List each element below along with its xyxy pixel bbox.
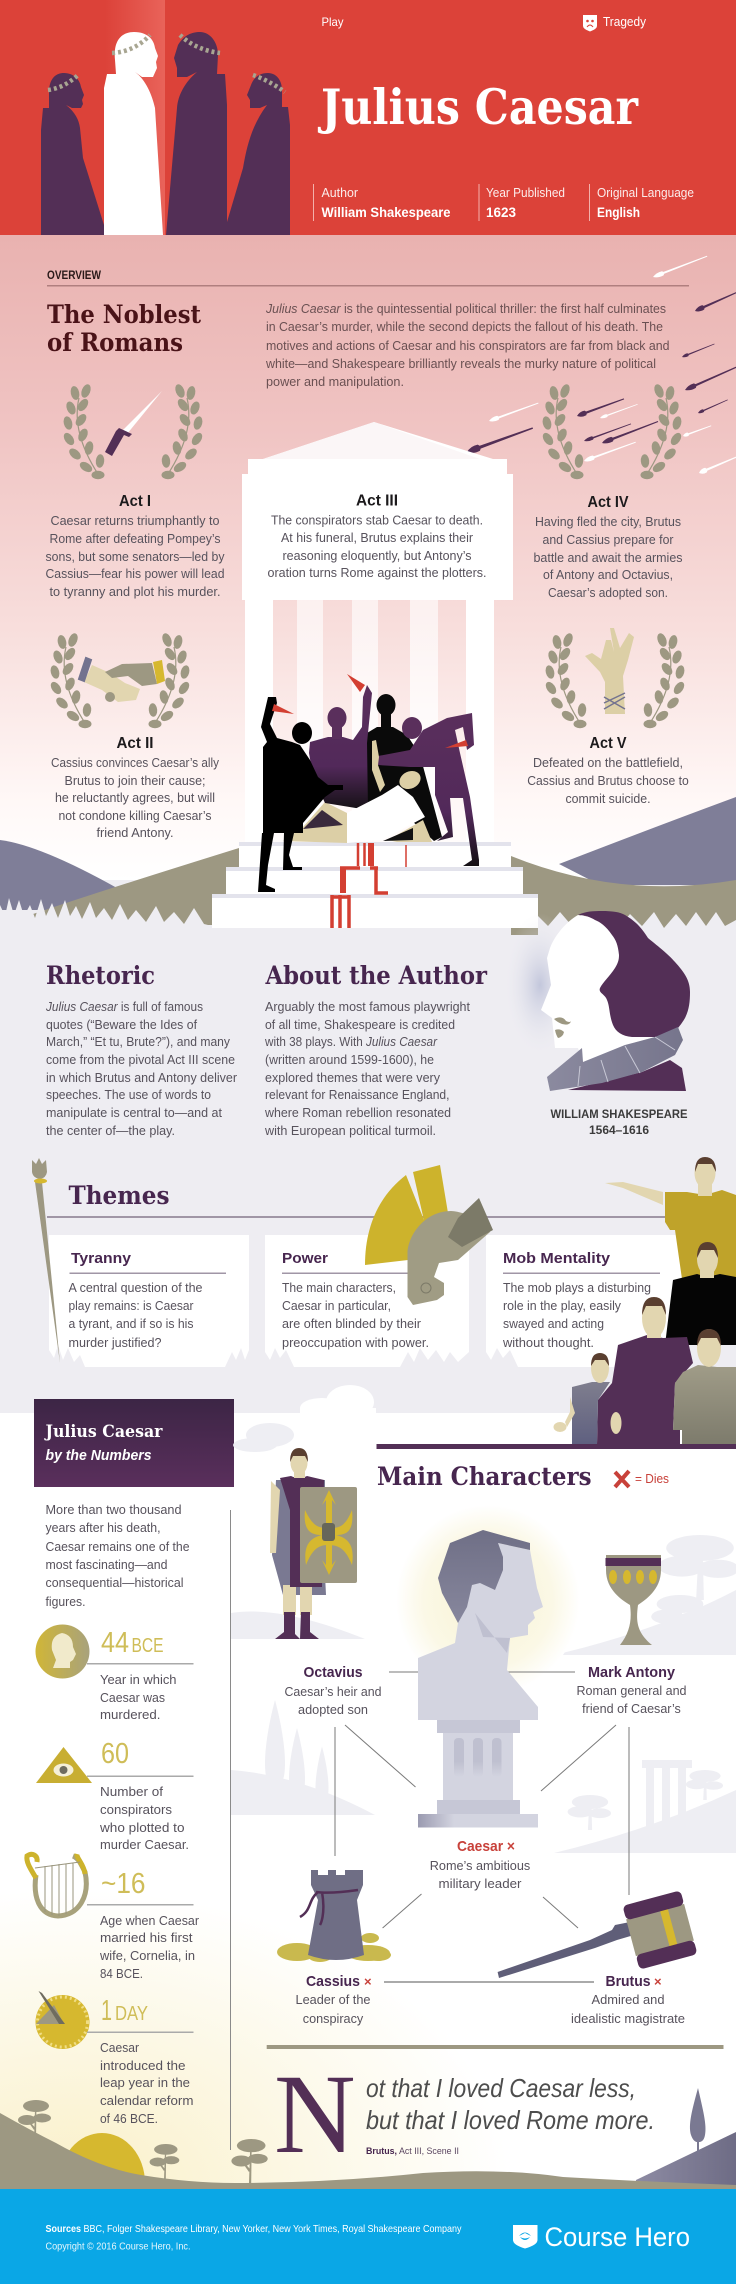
- text: overview paragraph: [265, 302, 670, 389]
- card: Tyranny: Tyranny: [71, 1250, 132, 1267]
- stat: 1 day: Caesar: [100, 2041, 139, 2055]
- figure: middle conspirator: [309, 674, 372, 810]
- text: Act II: [51, 735, 220, 840]
- panel: overview: [47, 270, 689, 389]
- background: pale yellow glow: [0, 1860, 560, 2189]
- text: Act III: The conspirators stab Caesar to death.: [271, 514, 483, 528]
- figure: Caesar: [347, 740, 432, 843]
- character: Mark Antony: [576, 1664, 687, 1716]
- text: Rhetoric body: in which Brutus and Antony deliver: [46, 1071, 237, 1085]
- text: Act II: Act II: [116, 735, 154, 752]
- character: Octavius: Caesar’s heir and: [284, 1685, 382, 1699]
- character: Caesar: Caesar ×: [457, 1838, 515, 1855]
- figure: back conspirator: [367, 694, 442, 841]
- text: Act I: Act I: [119, 493, 151, 510]
- stat: 44 BCE: 44: [101, 1627, 129, 1659]
- heading: The Noblest of Romans: of Romans: [47, 328, 183, 357]
- illustration: Shakespeare portrait: [504, 911, 690, 1091]
- quote text: [366, 2073, 655, 2135]
- card: Power: [265, 1235, 469, 1367]
- text: Act III: reasoning eloquently, but Antony’s: [282, 549, 472, 563]
- text: Act I: Caesar returns triumphantly to: [50, 514, 220, 528]
- stat: 60: conspirators: [100, 1803, 172, 1817]
- text: Act IV: Caesar’s adopted son.: [548, 586, 668, 600]
- heading: Rhetoric: Rhetoric: [46, 961, 155, 991]
- text: Rhetoric body: manipulate is central to—and at: [46, 1106, 223, 1120]
- temple columns: [245, 600, 494, 845]
- card: Tyranny: A central question of the: [68, 1281, 203, 1295]
- text: intro: [46, 1503, 190, 1609]
- character: Mark Antony: Mark Antony: [588, 1664, 676, 1681]
- meta: author: Author: [322, 186, 358, 200]
- legend: X = Dies: = Dies: [635, 1472, 669, 1486]
- meta: original language: Original Language: [597, 186, 694, 200]
- icon: spear standard: [32, 1158, 60, 1363]
- legend: X = Dies: [615, 1471, 669, 1487]
- footer: [0, 2189, 736, 2284]
- stat: 1 day: introduced the: [100, 2059, 186, 2073]
- text: Rhetoric body: quotes (“Beware the Ides of: [46, 1018, 198, 1032]
- text: Act III: [268, 492, 486, 580]
- text: Act V: Defeated on the battlefield,: [533, 756, 683, 770]
- figure: man in purple: [597, 1297, 693, 1444]
- stat: 60: [36, 1738, 194, 1852]
- card: Mob Mentality: [486, 1235, 685, 1367]
- character: Cassius: ×: [364, 1974, 372, 1989]
- stat: 60: who plotted to: [99, 1821, 185, 1835]
- character: Brutus: ×: [654, 1974, 662, 1989]
- card: Power: Caesar in particular,: [282, 1299, 391, 1313]
- icon: pouch with coins: [277, 1870, 391, 1962]
- panel: Main Characters: [231, 1423, 736, 2026]
- character: Octavius: adopted son: [298, 1703, 368, 1717]
- character: Cassius: Cassius: [306, 1973, 360, 1990]
- stat: 44 BCE: murdered.: [100, 1708, 160, 1722]
- panel: Act I: [46, 383, 225, 599]
- text: author body: relevant for Renaissance England,: [265, 1088, 450, 1102]
- stat: 60: 60: [101, 1738, 129, 1770]
- card: Tyranny: [49, 1235, 249, 1367]
- text: intro: most fascinating—and: [46, 1558, 168, 1572]
- panel: by the Numbers: [27, 1399, 234, 2150]
- label: Play: Play: [322, 15, 344, 29]
- character: Cassius: Leader of the: [296, 1993, 371, 2007]
- card: Power: The main characters,: [282, 1281, 396, 1295]
- text: Act V: Act V: [590, 735, 627, 752]
- figure: left conspirator: [258, 697, 343, 892]
- text: Act V: commit suicide.: [566, 792, 650, 806]
- figure: man in olive: [673, 1329, 736, 1444]
- text: Act II: not condone killing Caesar’s: [58, 809, 212, 823]
- text: Rhetoric body: come from the pivotal Act III scene: [46, 1053, 235, 1067]
- heading: The Noblest of Romans: [47, 300, 201, 357]
- character: Brutus: Brutus: [606, 1973, 650, 1990]
- heading: Themes: Themes: [68, 1181, 170, 1210]
- text: Act IV: Having fled the city, Brutus: [535, 515, 681, 529]
- meta: author: [313, 184, 451, 221]
- text: overview paragraph: power and manipulation.: [266, 375, 404, 389]
- meta: original language: [589, 184, 694, 221]
- text: Act I: [46, 493, 225, 599]
- pedestal: [418, 1720, 538, 1828]
- text: Act V: Cassius and Brutus choose to: [527, 774, 689, 788]
- text: Rhetoric body: the center of—the play.: [46, 1124, 175, 1138]
- quote: [274, 2052, 655, 2177]
- character: Cassius: [296, 1973, 372, 2026]
- panel: Act II: [49, 632, 220, 840]
- temple steps: [212, 842, 538, 928]
- stat: 1 day: of 46 BCE.: [100, 2112, 158, 2126]
- stat: 1 day: calendar reform: [100, 2094, 194, 2108]
- icon: gavel: [498, 1890, 698, 1978]
- meta: year published: Year Published: [486, 186, 565, 200]
- text: Act I: Rome after defeating Pompey’s: [50, 532, 220, 546]
- figure: Caesar's knee: [283, 802, 347, 843]
- stat: ~16: [27, 1854, 199, 1981]
- stat: 60: murder Caesar.: [100, 1838, 189, 1852]
- glow behind bust: [396, 1505, 580, 1695]
- text: overview paragraph: in Caesar’s murder, while the second depicts the fallout of his death. The: [266, 320, 663, 334]
- drop cap N: N: [274, 2052, 356, 2177]
- header box: [34, 1399, 234, 1487]
- temple roof: [242, 422, 513, 600]
- icon: goblet: [606, 1555, 661, 1645]
- stat: ~16: 84 BCE.: [100, 1967, 143, 1981]
- figures: assassination of Caesar: [258, 674, 479, 892]
- stat: ~16: married his first: [100, 1931, 193, 1945]
- text: Act IV: Act IV: [588, 494, 629, 511]
- text: Act I: Cassius—fear his power will lead: [46, 567, 225, 581]
- background scenery: [231, 1423, 736, 1853]
- panel: Act IV: [534, 383, 683, 600]
- caption: William Shakespeare 1564–1616: 1564–1616: [589, 1123, 649, 1137]
- sources: Sources BBC, Folger Shakespeare Library, New Yorker, New York Times, Royal Shakespeare Company: [46, 2223, 462, 2235]
- meta: year published: [478, 184, 565, 221]
- text: intro: consequential—historical: [46, 1576, 184, 1590]
- blood on steps: [331, 843, 406, 928]
- card: Mob Mentality: swayed and acting: [503, 1317, 604, 1331]
- stat: 1 day: DAY: [115, 2003, 148, 2025]
- text: overview paragraph: Julius Caesar is the quintessential political thriller: the first half culminates: [265, 302, 666, 316]
- card: Mob Mentality: role in the play, easily: [503, 1299, 622, 1313]
- character: Octavius: Octavius: [304, 1664, 362, 1681]
- quote text: ot that I loved Caesar less,: [366, 2073, 636, 2103]
- text: Act IV: [534, 494, 682, 600]
- stat: ~16: wife, Cornelia, in: [99, 1949, 195, 1963]
- quote attribution: Brutus, Act III, Scene II: [366, 2146, 459, 2157]
- card: Mob Mentality: Mob Mentality: [503, 1250, 611, 1267]
- figure: man in black: [665, 1242, 736, 1345]
- copyright: Copyright © 2016 Course Hero, Inc.: [46, 2240, 190, 2252]
- character: Brutus: Admired and: [592, 1993, 665, 2007]
- illustration: bust of Caesar: [418, 1530, 543, 1828]
- card: Tyranny: play remains: is Caesar: [68, 1299, 194, 1313]
- character: Brutus: [571, 1973, 685, 2026]
- text: Act III: Act III: [356, 492, 398, 510]
- stat: 1 day: 1: [101, 1995, 112, 2027]
- text: Act II: Brutus to join their cause;: [64, 774, 206, 788]
- text: Rhetoric body: [45, 1000, 237, 1138]
- character: Caesar: [430, 1838, 530, 1891]
- icon: wreath with handshake: [49, 632, 191, 728]
- panel: header: [0, 0, 736, 235]
- illustration: temple: [212, 422, 538, 928]
- text: author body: of all time, Shakespeare is credited: [265, 1018, 455, 1032]
- divider: purple bar: [376, 1444, 736, 1449]
- character: Caesar: Rome’s ambitious: [430, 1859, 530, 1873]
- card: Tyranny: murder justified?: [68, 1336, 162, 1350]
- figure: right conspirator: [378, 713, 479, 866]
- meta: original language: English: [597, 205, 640, 220]
- text: Act III: oration turns Rome against the plotters.: [268, 566, 486, 580]
- text: author body: with European political turmoil.: [264, 1124, 436, 1138]
- label: OVERVIEW: OVERVIEW: [47, 270, 101, 282]
- card: Mob Mentality: without thought.: [502, 1336, 594, 1350]
- arrows flying across overview: [466, 254, 736, 475]
- text: Rhetoric body: Julius Caesar is full of famous: [45, 1000, 203, 1014]
- stat: 44 BCE: BCE: [132, 1635, 164, 1657]
- icon: soldier with shield: [270, 1448, 357, 1639]
- landscape: bottom hills: [0, 2088, 736, 2233]
- card: Tyranny: a tyrant, and if so is his: [68, 1317, 194, 1331]
- text: Act II: friend Antony.: [96, 826, 174, 840]
- text: author body: (written around 1599-1600), he: [265, 1053, 434, 1067]
- illustration: mob of figures: [554, 1157, 736, 1444]
- stat: ~16: Age when Caesar: [100, 1914, 199, 1928]
- caption: William Shakespeare 1564–1616: WILLIAM SHAKESPEARE: [550, 1107, 688, 1121]
- stat: ~16: ~16: [101, 1868, 146, 1900]
- stat: 60: Number of: [100, 1785, 164, 1799]
- card: Mob Mentality: The mob plays a disturbing: [503, 1281, 651, 1295]
- text: Act I: to tyranny and plot his murder.: [50, 585, 220, 599]
- text: author body: with 38 plays. With Julius Caesar: [264, 1035, 438, 1049]
- character: Mark Antony: friend of Caesar’s: [582, 1702, 681, 1716]
- character: Mark Antony: Roman general and: [576, 1684, 687, 1698]
- bust head and shoulders: [418, 1543, 543, 1720]
- stat: 1 day: [36, 1991, 194, 2126]
- rule: olive: [267, 2045, 724, 2049]
- icon: helmet: [365, 1165, 493, 1305]
- caption: William Shakespeare 1564–1616: [550, 1107, 688, 1137]
- text: Act II: he reluctantly agrees, but will: [55, 791, 215, 805]
- text: overview paragraph: white—and Shakespeare brilliantly reveals the murky nature of political: [265, 357, 656, 371]
- text: author body: Arguably the most famous playwright: [265, 1000, 471, 1014]
- heading: Main Characters: Main Characters: [377, 1462, 592, 1491]
- text: intro: years after his death,: [46, 1521, 160, 1535]
- text: Rhetoric body: March,” “Et tu, Brute?”), and many: [46, 1035, 231, 1049]
- text: Act II: Cassius convinces Caesar’s ally: [51, 756, 220, 770]
- logo: shield: [513, 2225, 538, 2248]
- icon: wreath with dagger: [62, 383, 204, 479]
- panel: Rhetoric: [45, 961, 237, 1138]
- background: lavender section: [0, 880, 736, 1413]
- stat: 44 BCE: Caesar was: [100, 1691, 165, 1705]
- background: white numbers and characters section: [0, 1413, 736, 2189]
- header box: by the Numbers: [46, 1447, 152, 1464]
- figure: pointing man in yellow: [605, 1157, 736, 1300]
- label: Tragedy: Tragedy: [603, 15, 647, 29]
- logo: Course Hero: Course Hero: [544, 2222, 690, 2252]
- text: Act V: [527, 735, 689, 806]
- card: Power: Power: [282, 1250, 328, 1267]
- meta: year published: 1623: [486, 205, 516, 220]
- neck shadow: [475, 1613, 510, 1653]
- meta: author: William Shakespeare: [322, 205, 451, 220]
- panel: Themes: [32, 1157, 736, 1444]
- text: Act I: sons, but some senators—led by: [46, 550, 225, 564]
- stat: 44 BCE: Year in which: [100, 1673, 177, 1687]
- heading: The Noblest of Romans: The Noblest: [47, 300, 201, 329]
- text: author body: where Roman rebellion resonated: [264, 1106, 451, 1120]
- icon: figures in profile: [41, 32, 290, 235]
- panel: Act V: [527, 628, 689, 806]
- text: overview paragraph: motives and actions of Caesar and his conspirators are far from black and: [266, 339, 670, 353]
- text: author body: explored themes that were very: [265, 1071, 441, 1085]
- shadow under knee: [303, 810, 343, 829]
- decorative clouds: [300, 1385, 376, 1419]
- landscape: hills behind temple: [0, 797, 736, 940]
- text: intro: More than two thousand: [46, 1503, 182, 1517]
- text: Act IV: battle and await the armies: [534, 551, 682, 565]
- icon: tragedy mask: [583, 15, 597, 32]
- character: Octavius: [284, 1664, 382, 1717]
- character: Brutus: idealistic magistrate: [571, 2012, 685, 2026]
- stat: 44 BCE: [36, 1624, 194, 1722]
- character: Cassius: conspiracy: [303, 2012, 364, 2026]
- text: Rhetoric body: speeches. The use of words to: [46, 1088, 211, 1102]
- icon: wreath with hand: [544, 628, 686, 728]
- card: Power: preoccupation with power.: [282, 1336, 429, 1350]
- connector lines: [335, 1672, 629, 1982]
- panel: About the Author: [264, 911, 690, 1138]
- text: Act III: At his funeral, Brutus explains their: [281, 531, 473, 545]
- background: pink overview section: [0, 235, 736, 880]
- card: Power: are often blinded by their: [282, 1317, 421, 1331]
- text: Act IV: and Cassius prepare for: [542, 533, 674, 547]
- figure: small man in gray: [554, 1353, 610, 1444]
- heading: About the Author: About the Author: [265, 961, 488, 991]
- text: intro: figures.: [46, 1595, 86, 1609]
- title: Julius Caesar: [318, 78, 639, 136]
- text: author body: [264, 1000, 471, 1138]
- hair: [438, 1530, 530, 1623]
- character: Caesar: military leader: [438, 1877, 522, 1891]
- quote text: but that I loved Rome more.: [366, 2105, 655, 2135]
- icon: wreath: [541, 383, 683, 479]
- header box: Julius Caesar: [44, 1422, 163, 1441]
- text: intro: Caesar remains one of the: [46, 1540, 190, 1554]
- stat: 1 day: leap year in the: [100, 2076, 190, 2090]
- text: Act IV: of Antony and Octavius,: [543, 568, 673, 582]
